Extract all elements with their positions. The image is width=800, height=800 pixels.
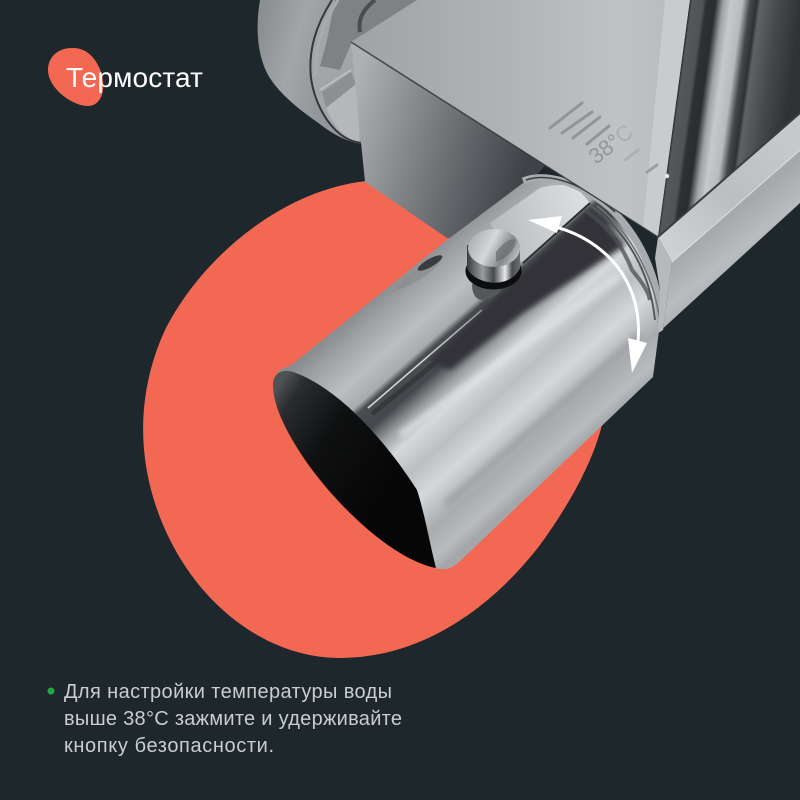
small hole xyxy=(390,253,444,293)
green bullet xyxy=(48,688,54,694)
note text: Для настройки температуры воды xyxy=(64,681,392,703)
rear round knob xyxy=(258,0,440,144)
cylinder body xyxy=(277,180,661,569)
groove xyxy=(368,208,625,414)
square housing left face xyxy=(351,42,560,240)
note text: кнопку безопасности. xyxy=(64,735,274,757)
temperature label: 38°C xyxy=(584,119,638,169)
note text: выше 38°C зажмите и удерживайте xyxy=(64,708,402,730)
engraved temperature scale xyxy=(550,103,669,178)
safety button xyxy=(466,229,522,300)
lower bar xyxy=(655,113,800,333)
title group xyxy=(48,48,203,106)
front dark face xyxy=(273,371,436,568)
thermostat illustration xyxy=(258,0,800,569)
raised plate xyxy=(490,185,590,263)
soft highlights xyxy=(400,275,640,505)
bright chamfer strip xyxy=(643,0,690,237)
front edge line xyxy=(351,42,658,237)
collar ring xyxy=(523,178,660,323)
rotation arrow xyxy=(528,216,647,373)
vertical chrome column xyxy=(658,0,800,237)
note text xyxy=(64,681,402,757)
large coral blob xyxy=(143,181,607,658)
title text: Термостат xyxy=(66,62,203,93)
square housing top face xyxy=(351,0,690,237)
title blob xyxy=(48,48,103,106)
bullet note xyxy=(48,681,402,757)
thermostat cylinder xyxy=(273,178,661,569)
